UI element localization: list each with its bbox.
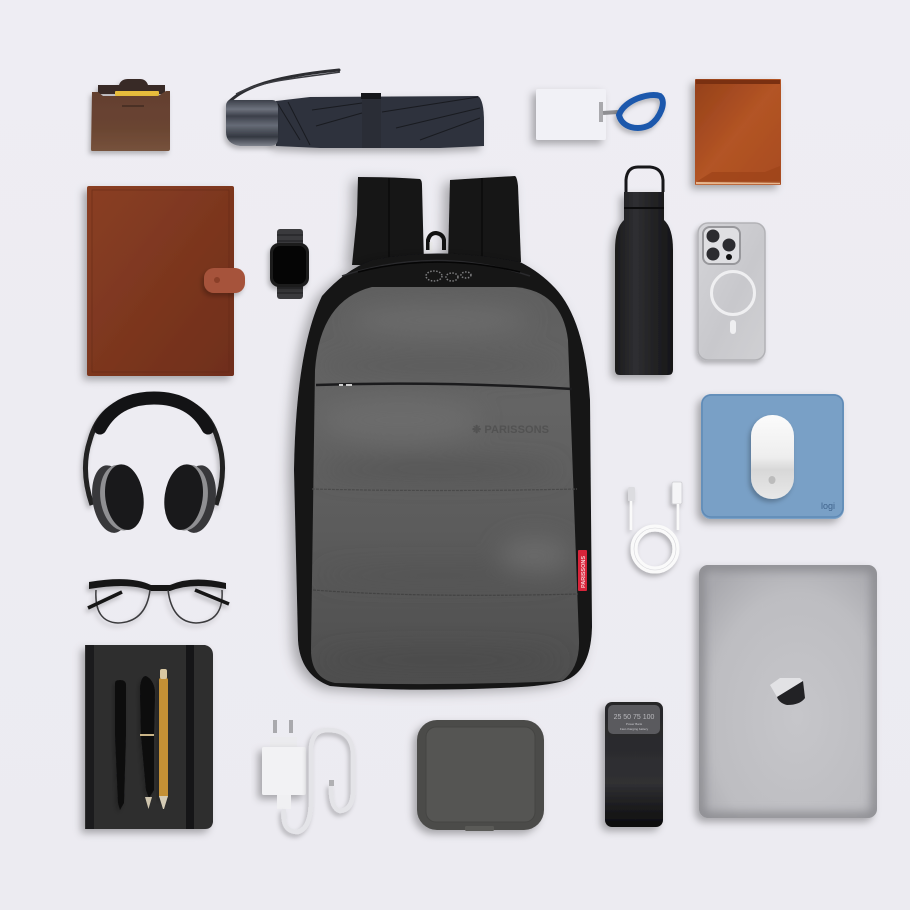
backpack: PARISSONS (581, 556, 587, 588)
eyeglasses (88, 579, 229, 623)
headband pad (100, 398, 208, 428)
black notebook with pens (85, 645, 213, 829)
usb cable (628, 482, 682, 570)
logi mark: logi (821, 501, 835, 511)
phone with clear case (698, 223, 765, 360)
headphones (85, 396, 223, 535)
left ear cup (88, 461, 148, 535)
panel highlights (350, 312, 564, 574)
smartwatch (270, 229, 309, 299)
power bank (605, 702, 663, 827)
wall charger with cable (262, 720, 353, 832)
water bottle (615, 167, 673, 375)
apple logo (770, 678, 805, 705)
headband arms (85, 396, 223, 505)
flat-lay scene (76, 68, 878, 840)
power bank: Power Bank (626, 722, 643, 726)
ID card with blue lanyard (536, 89, 663, 140)
backpack (294, 176, 592, 690)
brand logo: ❉ PARISSONS (472, 424, 549, 436)
lunch box (417, 720, 544, 831)
backpack body (294, 253, 592, 690)
red brand tag (578, 550, 587, 591)
orange leather wallet (695, 79, 781, 185)
backpack straps (352, 176, 521, 265)
laptop (699, 565, 877, 818)
black pen (115, 680, 126, 810)
gold pen (159, 678, 168, 798)
front pocket zip (316, 384, 572, 389)
backpack handle loop (428, 233, 444, 250)
black and gold pen (140, 676, 155, 798)
grey front panel (311, 287, 579, 684)
puffer seams (312, 489, 577, 490)
right ear cup (160, 461, 220, 535)
power bank: 25 50 75 100 (614, 714, 655, 721)
power bank: Fast charging battery (620, 727, 649, 731)
camera module (703, 227, 740, 264)
zipper pulls (426, 271, 471, 281)
mouse pad with mouse (701, 394, 844, 519)
magsafe ring (712, 272, 754, 314)
brown leather notebook (87, 186, 245, 376)
small brown wallet (91, 79, 170, 151)
umbrella (226, 70, 484, 148)
white mouse (751, 415, 794, 499)
